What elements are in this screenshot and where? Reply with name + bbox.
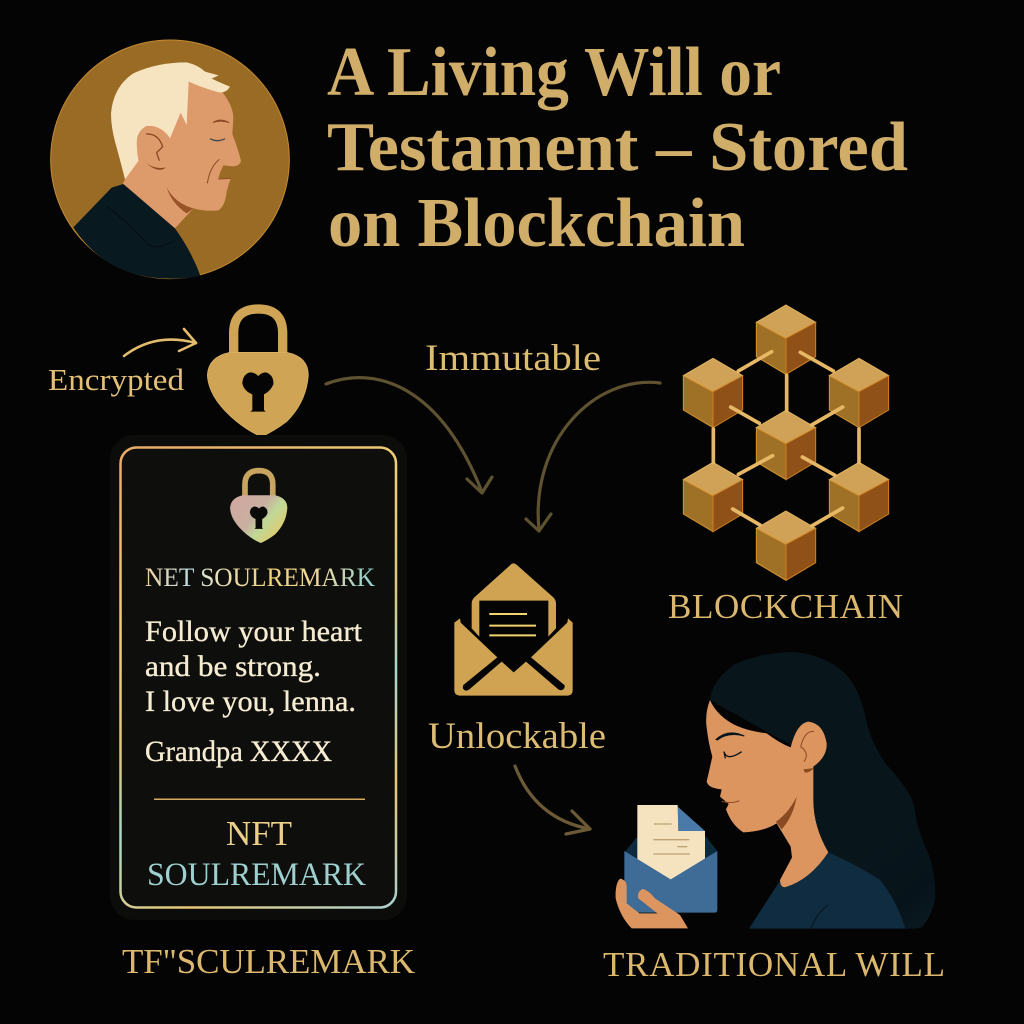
icon: blue envelope with letter — [624, 805, 717, 913]
label: Encrypted: Encrypted — [48, 362, 185, 397]
label: Traditional Will: TRADITIONAL WILL — [603, 945, 945, 984]
message: Grandpa XXXX — [145, 735, 332, 768]
label: card caption: TF"SCULREMARK — [122, 942, 415, 981]
label: Blockchain: BLOCKCHAIN — [668, 587, 903, 626]
icon: woman reading a letter — [616, 652, 935, 929]
title: on Blockchain — [328, 185, 745, 262]
icon: iridescent padlock — [230, 471, 287, 543]
icon: heart padlock — [207, 309, 308, 437]
message: Follow your heart — [145, 615, 363, 648]
arrow: lock to envelope — [326, 378, 492, 493]
label: Immutable: Immutable — [425, 338, 601, 379]
icon: hand — [616, 879, 688, 928]
arrow: envelope to traditional will — [515, 766, 590, 834]
label: Unlockable: Unlockable — [428, 716, 606, 757]
arrow: blockchain to envelope — [526, 382, 660, 531]
message — [145, 615, 363, 768]
icon: open envelope — [454, 563, 573, 696]
card heading: NET SOULREMARK — [145, 563, 375, 592]
card footer: NFT — [226, 814, 292, 853]
panel: NFT soulremark card: SOULREMARK — [147, 857, 366, 893]
message: and be strong. — [145, 650, 321, 683]
panel: NFT soulremark card — [110, 435, 407, 920]
arrow: encrypted to lock — [124, 329, 196, 356]
title: A Living Will or — [327, 34, 781, 111]
title — [327, 34, 908, 262]
title: Testament – Stored — [327, 109, 908, 186]
icon: elderly man portrait — [51, 40, 289, 279]
message: I love you, lenna. — [145, 685, 356, 718]
icon: blockchain network of cubes — [683, 305, 889, 580]
